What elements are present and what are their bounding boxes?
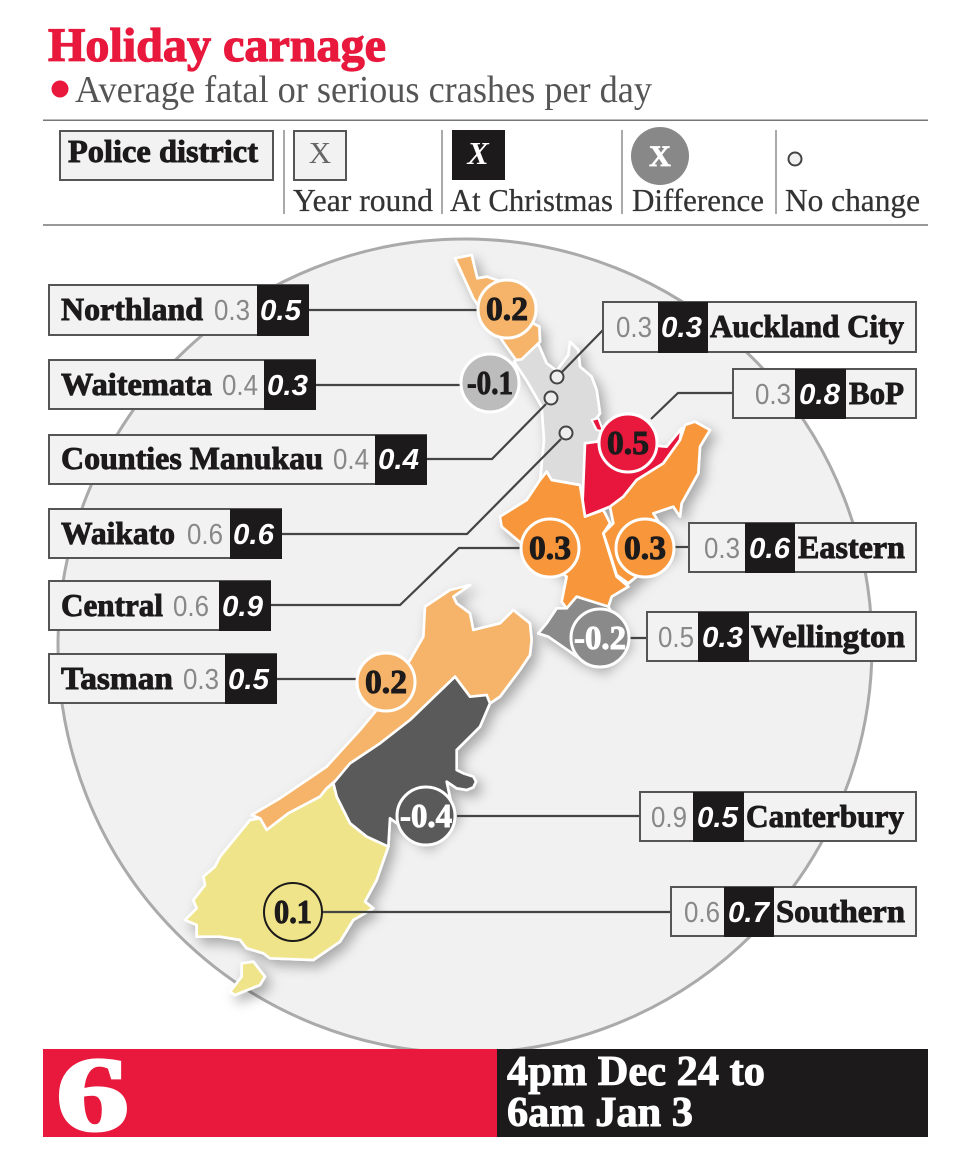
leader lines: [270, 310, 733, 912]
legend: police district key: Police district: [68, 133, 258, 169]
region: Southern: [185, 783, 388, 960]
label: Tasman: [49, 654, 277, 704]
label: Wellington: [647, 612, 916, 662]
region: Northland: [455, 255, 540, 360]
label: Counties Manukau: Counties Manukau: [61, 440, 323, 476]
label: Southern: Southern: [776, 893, 905, 929]
label: BoP: 0.3: [755, 379, 791, 411]
label: Counties Manukau: 0.4: [333, 444, 369, 476]
label: BoP: BoP: [849, 375, 904, 411]
label: Wellington: 0.5: [658, 622, 694, 654]
marker: Auckland City: [550, 370, 564, 384]
label: Waikato: [49, 509, 282, 559]
label: Waikato: 0.6: [187, 519, 223, 551]
label: Waikato: Waikato: [61, 515, 175, 551]
label: Auckland City: 0.3: [616, 312, 652, 344]
bubble: Eastern 0.3: [616, 519, 674, 577]
marker: Waikato: [560, 426, 572, 440]
legend: difference key: Difference: [632, 182, 764, 218]
label: Southern: 0.6: [684, 897, 720, 929]
bottom band: [43, 1035, 928, 1153]
legend: year round key: [293, 131, 433, 218]
bubble: Wellington -0.2: [571, 609, 629, 667]
label: Central: [49, 581, 271, 631]
region: Tasman: [252, 585, 532, 830]
title: Holiday carnage: [48, 19, 386, 72]
label: Canterbury: [640, 792, 916, 842]
bubble: Northland 0.2: 0.2: [486, 291, 528, 328]
label: Tasman: 0.3: [183, 664, 219, 696]
legend: police district key: [60, 131, 273, 180]
label: Eastern: Eastern: [798, 529, 905, 565]
region: Eastern: [603, 422, 710, 583]
label: Waitemata: 0.3: [267, 370, 308, 402]
label: Counties Manukau: [49, 435, 427, 485]
label: Counties Manukau: 0.4: [378, 444, 419, 476]
label: Northland: 0.5: [260, 295, 302, 327]
black panel with dates: 4pm Dec 24 to: [507, 1049, 765, 1095]
label: Auckland City: [603, 302, 916, 353]
bubble: Canterbury -0.4: [397, 787, 455, 845]
bubble: Tasman 0.2: [357, 653, 415, 711]
label: Auckland City: 0.3: [661, 312, 702, 344]
bubble: Central 0.3: [521, 519, 579, 577]
legend: no change key: [785, 152, 920, 218]
label: Waitemata: 0.4: [222, 370, 258, 402]
legend: difference key: X: [649, 140, 671, 173]
bubble: Southern 0.1: 0.1: [274, 894, 312, 931]
bubble: Wellington -0.2: -0.2: [574, 620, 626, 657]
legend: no change key: No change: [785, 182, 920, 218]
region: Wellington: [538, 597, 627, 667]
label: Northland: Northland: [61, 291, 203, 327]
label: Southern: [671, 887, 916, 937]
label: Canterbury: 0.9: [651, 802, 687, 834]
label: Central: Central: [61, 587, 163, 623]
legend: at christmas key: X: [466, 135, 489, 171]
bubble: Bay of Plenty 0.5: [599, 414, 657, 472]
label: BoP: 0.8: [799, 379, 841, 411]
label: Eastern: 0.3: [704, 533, 740, 565]
label: Waitemata: Waitemata: [61, 366, 212, 402]
label: Canterbury: Canterbury: [746, 798, 904, 834]
region: Bay of Plenty: [583, 418, 682, 517]
red panel with count: 6: [56, 1035, 129, 1153]
legend: [43, 120, 928, 226]
legend: difference key: [631, 127, 764, 218]
label: Central: 0.6: [173, 591, 209, 623]
bubble: Tasman 0.2: 0.2: [365, 664, 407, 701]
label: Wellington: Wellington: [751, 618, 905, 654]
bubble: Southern 0.1: [264, 883, 322, 941]
black panel with dates: 6am Jan 3: [507, 1090, 693, 1136]
bubble: Bay of Plenty 0.5: 0.5: [607, 425, 649, 462]
bubble: Eastern 0.3: 0.3: [624, 530, 666, 567]
legend: at christmas key: At Christmas: [450, 182, 613, 218]
label: Auckland City: Auckland City: [710, 308, 904, 344]
region: Stewart Island: [230, 962, 265, 995]
region: Canterbury: [333, 677, 490, 847]
marker: Counties Manukau: [544, 392, 558, 404]
map of New Zealand: [185, 255, 710, 995]
background circle: [58, 239, 872, 1053]
label: Waikato: 0.6: [233, 519, 275, 551]
legend: year round key: Year round: [293, 182, 433, 218]
label: Tasman: Tasman: [61, 660, 173, 696]
bubble: Waitemata -0.1: -0.1: [467, 365, 513, 402]
bubble: Central 0.3: 0.3: [529, 530, 571, 567]
region: Central: [500, 472, 628, 608]
black panel with dates: [497, 1049, 928, 1137]
label: Central: 0.9: [222, 591, 263, 623]
bubble: Waitemata -0.1: [461, 354, 519, 412]
legend: at christmas key: [450, 130, 613, 218]
label: Wellington: 0.3: [702, 622, 743, 654]
bubble: Northland 0.2: [478, 280, 536, 338]
region: Waitemata, Auckland, Counties Manukau, Waikato: [514, 342, 603, 500]
label: Northland: 0.3: [214, 295, 250, 327]
label: BoP: [733, 369, 916, 419]
label: Eastern: 0.6: [749, 533, 791, 565]
legend: year round key: X: [309, 135, 331, 170]
bubble: Canterbury -0.4: -0.4: [400, 798, 452, 835]
label: Northland: [49, 285, 309, 336]
label: Tasman: 0.5: [228, 664, 270, 696]
label: Canterbury: 0.5: [697, 802, 739, 834]
label: Eastern: [689, 523, 916, 573]
red panel with count: [43, 1035, 497, 1153]
subtitle: Average fatal or serious crashes per day: [75, 69, 652, 111]
label: Waitemata: [49, 360, 316, 410]
label: Southern: 0.7: [728, 897, 771, 929]
